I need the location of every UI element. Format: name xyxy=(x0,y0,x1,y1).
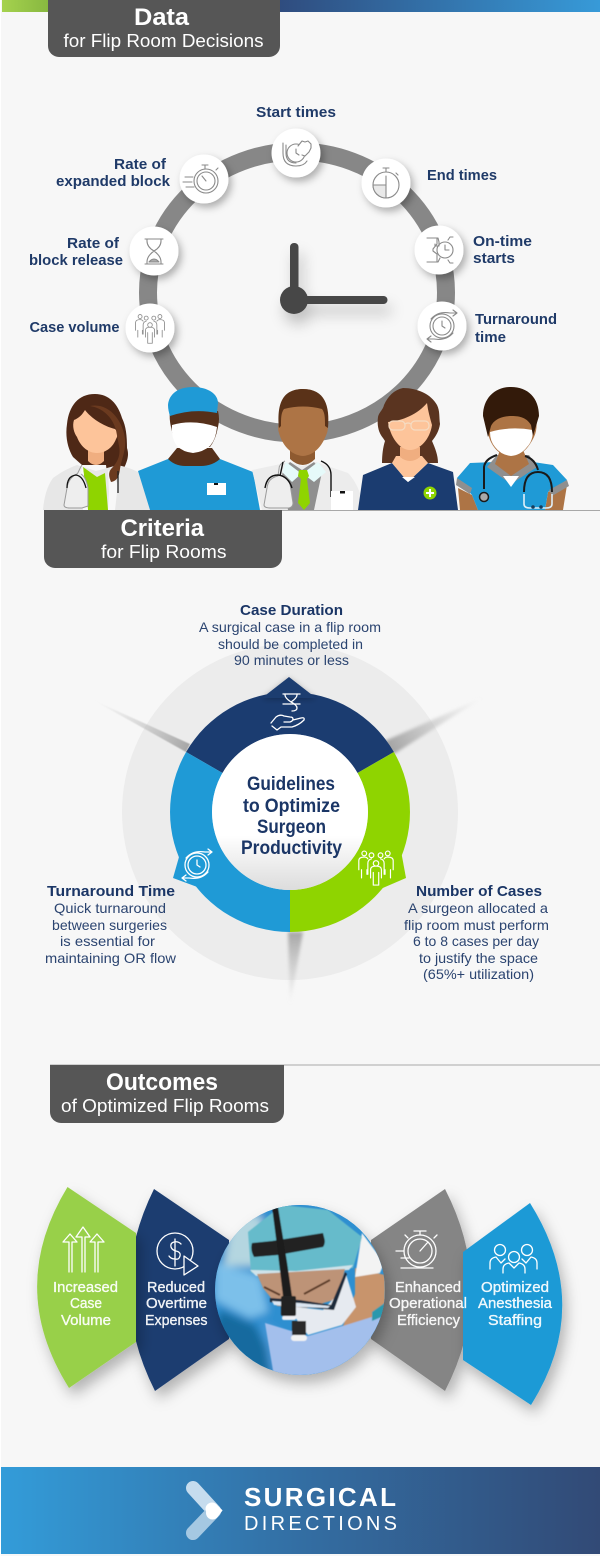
text block: Case Duration: A surgical case in a flip room xyxy=(199,619,381,635)
label: Rate of expanded block xyxy=(56,157,171,190)
label: Start times: Start times xyxy=(256,105,336,121)
text block: Case Duration: should be completed in xyxy=(218,636,363,652)
subheading: for Flip Room Decisions: for Flip Room Decisions xyxy=(64,31,264,51)
segment: number of cases green xyxy=(290,752,410,932)
label: Reduced Overtime Expenses: Reduced xyxy=(147,1279,205,1296)
person: nurse with glasses xyxy=(358,388,458,510)
logo wordmark: DIRECTIONS xyxy=(244,1513,397,1535)
label: Enhanced Operational Efficiency: Operational xyxy=(389,1295,467,1312)
icon: rate of expanded block xyxy=(180,154,228,204)
label: Optimized Anesthesia Staffing: Optimized xyxy=(481,1279,549,1296)
text block: Number of Cases: Number of Cases xyxy=(416,883,542,900)
label: On-time starts xyxy=(473,234,532,267)
donut diagram: guidelines xyxy=(93,644,484,1006)
icon: turnaround time xyxy=(418,302,466,350)
heading: Criteria: Criteria xyxy=(120,515,205,542)
logo mark: chevron xyxy=(193,1488,214,1533)
label: Turnaround time: Turnaround xyxy=(475,312,557,328)
text block: Turnaround Time: maintaining OR flow xyxy=(45,950,177,966)
label: Optimized Anesthesia Staffing: Staffing xyxy=(488,1312,542,1329)
label: Rate of expanded block: expanded block xyxy=(56,174,171,190)
segment: case duration navy xyxy=(186,677,394,773)
petal: increased case volume xyxy=(37,1187,136,1388)
text block: Number of Cases: (65%+ utilization) xyxy=(423,966,534,982)
centre title xyxy=(241,774,342,859)
label: Increased Case Volume: Increased xyxy=(53,1279,118,1296)
illustration: medical staff xyxy=(43,387,569,510)
text block: Case Duration xyxy=(199,602,381,668)
icon: case volume xyxy=(126,304,174,352)
heading: Data: Data xyxy=(134,4,190,31)
heading panel: Data xyxy=(48,0,280,57)
label: On-time starts: starts xyxy=(473,251,515,267)
centre title: Surgeon xyxy=(257,817,326,838)
label: Reduced Overtime Expenses: Overtime xyxy=(146,1295,207,1312)
person: male doctor with green tie xyxy=(252,389,364,510)
text block: Number of Cases: flip room must perform xyxy=(404,917,549,933)
centre title: Guidelines xyxy=(247,774,335,795)
subheading: for Flip Rooms: for Flip Rooms xyxy=(101,542,226,562)
top gradient bar xyxy=(2,0,600,12)
petal: reduced overtime expenses xyxy=(129,1189,229,1391)
label: Reduced Overtime Expenses: Expenses xyxy=(145,1312,208,1329)
text block: Turnaround Time: Quick turnaround xyxy=(54,900,166,916)
label: Enhanced Operational Efficiency: Enhanced xyxy=(395,1279,461,1296)
label: Case volume: Case volume xyxy=(30,320,120,336)
shadow rays xyxy=(93,697,484,1006)
outer grey disc xyxy=(122,644,458,980)
segment: turnaround time blue xyxy=(170,752,290,932)
text block: Case Duration: 90 minutes or less xyxy=(234,652,349,668)
outcomes diagram xyxy=(37,1187,562,1405)
photo: surgeon with loupes xyxy=(210,1200,390,1393)
divider line under staff xyxy=(282,510,600,511)
label: Rate of block release: block release xyxy=(29,253,123,269)
label: End times: End times xyxy=(427,168,497,184)
heading: Outcomes: Outcomes xyxy=(106,1069,218,1096)
text block: Case Duration: Case Duration xyxy=(240,602,343,619)
label: Rate of block release: Rate of xyxy=(67,236,119,252)
subheading: of Optimized Flip Rooms: of Optimized Flip Rooms xyxy=(61,1096,269,1116)
text block: Turnaround Time: is essential for xyxy=(60,933,155,949)
label: On-time starts: On-time xyxy=(473,234,532,250)
icon: rate of block release xyxy=(130,226,178,276)
clock hands xyxy=(280,243,388,314)
clock diagram xyxy=(29,105,557,434)
heading panel: Outcomes xyxy=(50,1065,284,1123)
centre title: to Optimize xyxy=(243,796,340,817)
footer band xyxy=(1,1467,600,1554)
icon: end times xyxy=(362,158,410,208)
petal: enhanced operational efficiency xyxy=(371,1189,471,1391)
heading panel: Criteria xyxy=(44,510,282,568)
text block: Turnaround Time xyxy=(45,883,177,966)
label: Turnaround time: time xyxy=(475,330,506,346)
centre circle xyxy=(212,734,368,890)
person: surgeon with blue cap xyxy=(138,387,260,510)
label: Reduced Overtime Expenses xyxy=(145,1279,208,1329)
label: Rate of expanded block: Rate of xyxy=(114,157,166,173)
text block: Number of Cases: A surgeon allocated a xyxy=(408,900,548,916)
icon: on-time starts xyxy=(414,226,464,274)
label: Increased Case Volume: Volume xyxy=(61,1312,111,1329)
icon: start times xyxy=(272,128,320,178)
text block: Number of Cases: to justify the space xyxy=(419,950,538,966)
text block: Number of Cases: 6 to 8 cases per day xyxy=(413,933,539,949)
centre title: Productivity xyxy=(241,838,342,859)
label: Increased Case Volume xyxy=(53,1279,118,1329)
text block: Turnaround Time: Turnaround Time xyxy=(47,883,175,900)
label: Rate of block release xyxy=(29,236,123,269)
label: Optimized Anesthesia Staffing xyxy=(478,1279,553,1329)
label: Enhanced Operational Efficiency xyxy=(389,1279,467,1329)
text block: Turnaround Time: between surgeries xyxy=(52,917,167,933)
logo wordmark xyxy=(244,1482,397,1535)
label: Increased Case Volume: Case xyxy=(70,1295,102,1312)
person: nurse with stethoscope xyxy=(456,387,569,510)
label: Enhanced Operational Efficiency: Efficiency xyxy=(397,1312,460,1329)
label: Turnaround time xyxy=(475,312,557,346)
label: Optimized Anesthesia Staffing: Anesthesia xyxy=(478,1295,553,1312)
petal: optimized anesthesia staffing xyxy=(463,1203,562,1405)
logo wordmark: SURGICAL xyxy=(244,1482,396,1512)
clock ring xyxy=(148,152,446,434)
text block: Number of Cases xyxy=(404,883,549,982)
divider line above outcomes xyxy=(50,1064,600,1066)
person: female doctor xyxy=(43,394,150,510)
